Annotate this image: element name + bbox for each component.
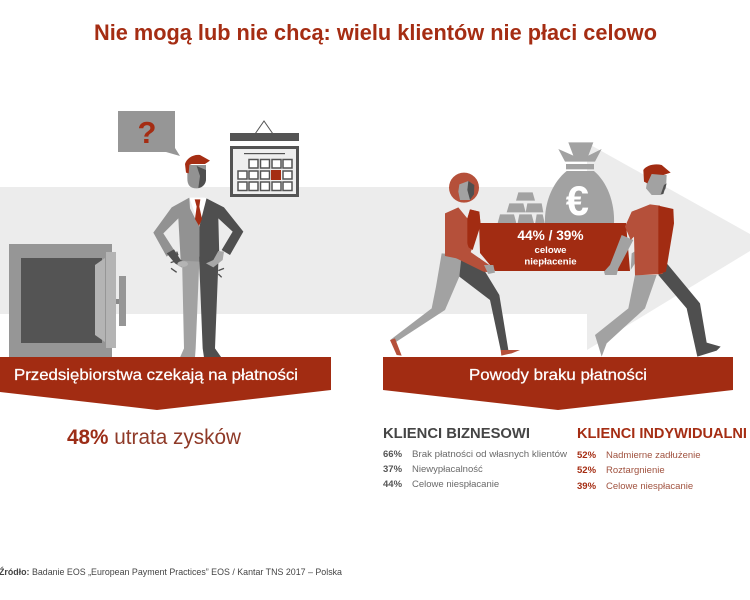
column: individual clients: 52% <box>577 465 597 476</box>
man body <box>595 164 674 357</box>
red banner: reasons for non-payment: Powody braku płatności <box>469 367 647 384</box>
icon: businessman with empty pockets <box>153 155 243 357</box>
column: individual clients: 39% <box>577 481 597 492</box>
column: individual clients: KLIENCI INDYWIDUALNI <box>577 426 747 442</box>
red banner: reasons for non-payment <box>383 357 733 410</box>
icon: speech bubble with question mark <box>118 111 180 156</box>
icon: money bag with euro <box>545 142 614 224</box>
source note: Źródło: Badanie EOS „European Payment Practices” EOS / Kantar TNS 2017 – Polska <box>0 567 343 578</box>
carried red box: celowe <box>534 245 566 256</box>
column: business clients: Celowe niespłacanie <box>412 479 499 490</box>
red banner: businesses waiting <box>0 357 331 410</box>
illustration: two people carrying money <box>390 142 721 357</box>
icon: safe <box>9 244 126 357</box>
icon: gold bars <box>497 192 545 224</box>
carried red box <box>479 223 630 271</box>
carried red box: niepłacenie <box>524 256 577 268</box>
icon: calendar <box>230 121 299 197</box>
man back leg <box>658 264 721 357</box>
column: business clients: 66% <box>383 449 403 460</box>
carried red box: 44% / 39% <box>517 228 584 243</box>
column: individual clients: 52% <box>577 450 597 461</box>
woman head <box>449 173 479 203</box>
column: business clients: Brak płatności od własnych klientów <box>412 449 567 460</box>
title: Nie mogą lub nie chcą: wielu klientów nie płaci celowo <box>94 20 657 45</box>
woman torso <box>445 207 481 259</box>
column: business clients: KLIENCI BIZNESOWI <box>383 426 530 442</box>
woman legs <box>390 253 520 356</box>
column: business clients: 44% <box>383 479 403 490</box>
icon: money bag with euro: € <box>566 177 589 224</box>
column: individual clients: Celowe niespłacanie <box>606 481 693 492</box>
background arrow <box>0 143 750 350</box>
woman arm <box>447 209 495 274</box>
icon: speech bubble with question mark: ? <box>138 115 156 150</box>
column: business clients: Niewypłacalność <box>412 464 483 475</box>
column: business clients <box>383 426 567 490</box>
column: individual clients: Roztargnienie <box>606 465 665 476</box>
column: individual clients: Nadmierne zadłużenie <box>606 450 701 461</box>
red banner: businesses waiting: Przedsiębiorstwa czekają na płatności <box>14 367 298 384</box>
column: business clients: 37% <box>383 464 403 475</box>
stat: lost profits: 48% utrata zysków <box>67 426 242 449</box>
column: individual clients <box>577 426 747 492</box>
